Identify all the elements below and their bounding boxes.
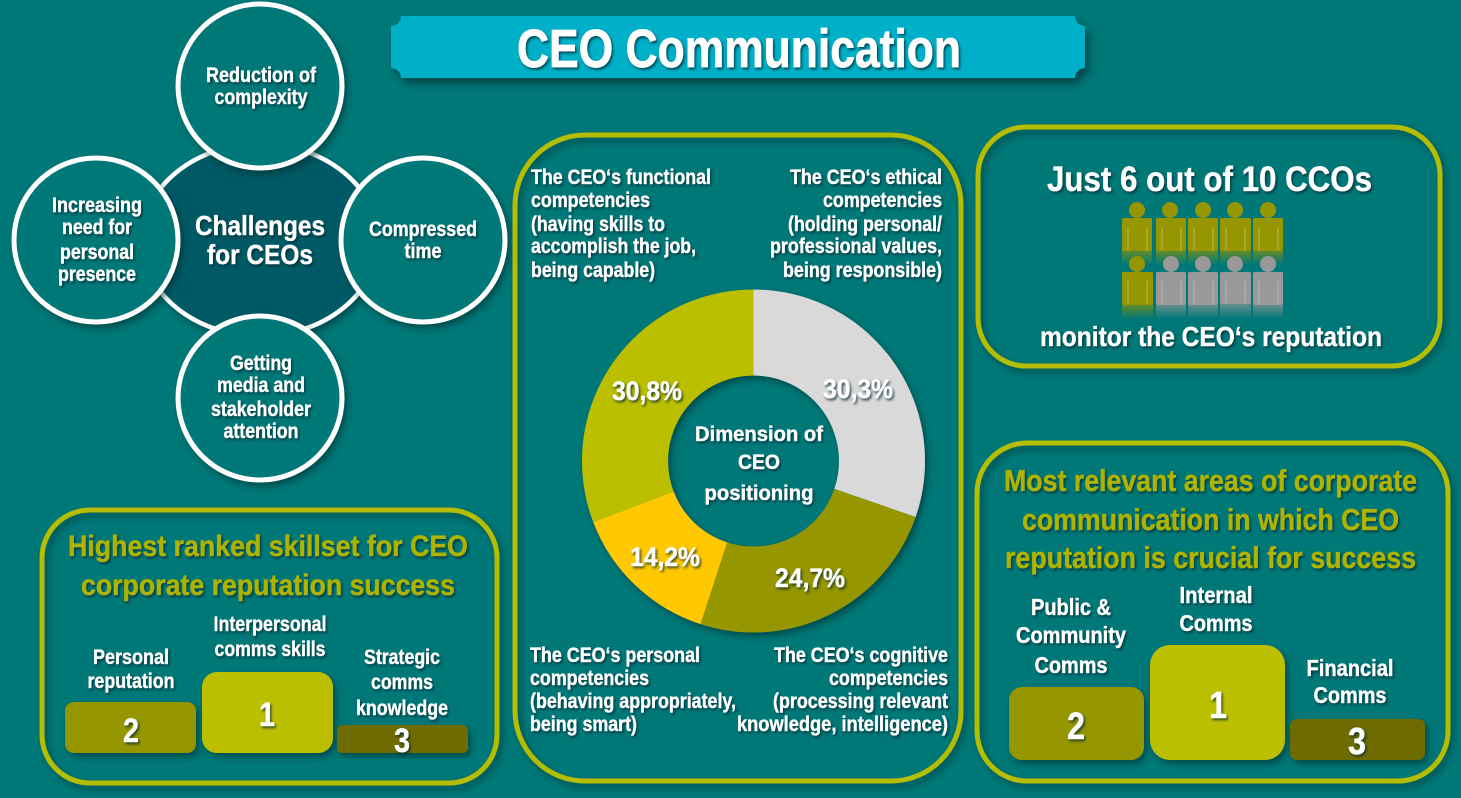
circle: increasing need for personal presence: Increasing <box>52 194 142 217</box>
text: functional competencies: competencies <box>531 189 650 212</box>
circle: compressed time <box>341 158 505 322</box>
podium: rank 2 <box>65 646 196 753</box>
donut chart <box>625 332 882 590</box>
donut values: 24,7% <box>775 563 845 593</box>
text: cognitive competencies: knowledge, intelligence) <box>737 713 948 736</box>
podium: rank 2: 2 <box>1067 706 1085 748</box>
circle: compressed time: time <box>404 240 442 263</box>
text: personal competencies: being smart) <box>530 713 637 736</box>
text: ethical competencies <box>770 166 942 282</box>
podium: rank 1: 1 <box>259 696 275 734</box>
circle: getting media and stakeholder attention: media and <box>217 374 305 397</box>
headline: Just 6 out of 10 CCOs <box>1047 160 1372 199</box>
panel: highest ranked skillset <box>42 510 497 783</box>
text: cognitive competencies: competencies <box>829 667 948 690</box>
text: functional competencies <box>531 166 711 282</box>
panel: most relevant areas <box>977 443 1448 781</box>
circle: reduction of complexity: complexity <box>214 86 308 109</box>
heading: Highest ranked skillset for CEO <box>68 530 468 563</box>
text: personal competencies: (behaving appropriately, <box>530 690 736 713</box>
podium: rank 3: Strategic <box>364 646 440 669</box>
text: personal competencies: competencies <box>530 667 649 690</box>
circle: getting media and stakeholder attention <box>178 316 342 480</box>
donut center label: CEO <box>738 451 780 474</box>
podium: rank 2: Community <box>1016 622 1126 648</box>
heading <box>1004 463 1417 575</box>
heading <box>68 530 468 602</box>
circle: getting media and stakeholder attention: attention <box>224 420 298 443</box>
circle: compressed time: Compressed <box>369 218 477 241</box>
donut center label: positioning <box>704 482 814 505</box>
podium: rank 3: knowledge <box>356 697 448 720</box>
donut values: 30,3% <box>823 374 893 404</box>
podium: rank 2 <box>1009 594 1144 760</box>
center ellipse: Challenges <box>195 210 325 241</box>
text: ethical competencies: competencies <box>823 189 942 212</box>
podium: rank 3: Comms <box>1314 682 1386 708</box>
podium: rank 2: Comms <box>1034 652 1108 678</box>
text: ethical competencies: (holding personal/ <box>788 213 942 236</box>
text: personal competencies <box>530 644 736 736</box>
donut center label: Dimension of <box>695 423 824 446</box>
podium: rank 3 <box>337 646 468 760</box>
podium: rank 3 <box>1290 655 1425 763</box>
text: ethical competencies: professional values, <box>770 235 942 258</box>
podium: rank 1 <box>202 613 333 753</box>
podium: rank 2: 2 <box>123 712 139 750</box>
center ellipse: for CEOs <box>207 239 313 270</box>
donut values: 14,2% <box>630 542 700 572</box>
diagram: challenges for CEOs <box>14 4 505 480</box>
text: cognitive competencies: The CEO‘s cognitive <box>774 644 948 667</box>
circle: increasing need for personal presence <box>14 158 178 322</box>
podium: rank 3: 3 <box>1348 721 1366 763</box>
donut values: 30,8% <box>612 376 682 406</box>
donut values <box>612 374 893 593</box>
circle: getting media and stakeholder attention: Getting <box>230 352 292 375</box>
title banner <box>391 16 1085 79</box>
circle: reduction of complexity: Reduction of <box>206 64 317 87</box>
circle: reduction of complexity <box>178 4 342 168</box>
caption: monitor the CEO‘s reputation <box>1040 321 1382 352</box>
circle: increasing need for personal presence: presence <box>58 263 136 286</box>
circle: increasing need for personal presence: personal <box>60 241 134 264</box>
text: ethical competencies: being responsible) <box>783 259 942 282</box>
text: cognitive competencies: (processing relevant <box>773 690 948 713</box>
heading: corporate reputation success <box>81 569 455 602</box>
text: ethical competencies: The CEO‘s ethical <box>790 166 942 189</box>
icon: row of people, bottom <box>1122 256 1283 319</box>
donut center label <box>695 423 824 505</box>
podium: rank 1: Internal <box>1180 582 1252 608</box>
podium: rank 1: 1 <box>1209 685 1227 727</box>
podium: rank 1: Comms <box>1180 610 1252 636</box>
circle: getting media and stakeholder attention: stakeholder <box>211 398 311 421</box>
heading: communication in which CEO <box>1022 502 1399 537</box>
title: CEO Communication <box>517 19 961 79</box>
podium: rank 2: Public & <box>1031 594 1111 620</box>
podium: rank 1 <box>1150 582 1285 760</box>
text: functional competencies: The CEO‘s functional <box>531 166 711 189</box>
icon: row of people, top <box>1122 202 1283 265</box>
circle: increasing need for personal presence: need for <box>62 216 132 239</box>
text: cognitive competencies <box>737 644 948 736</box>
text: functional competencies: (having skills to <box>531 213 665 236</box>
podium: rank 1: Interpersonal <box>214 613 326 636</box>
podium: rank 3: Financial <box>1306 655 1394 681</box>
text: functional competencies: being capable) <box>531 259 655 282</box>
podium: rank 1: comms skills <box>214 638 326 661</box>
panel: CCOs monitoring <box>978 127 1440 366</box>
podium: rank 3: comms <box>371 671 433 694</box>
podium: rank 2: reputation <box>88 670 174 693</box>
podium: rank 2: Personal <box>93 646 169 669</box>
panel: dimension of CEO positioning <box>515 135 961 781</box>
podium: rank 3: 3 <box>394 722 410 760</box>
text: personal competencies: The CEO‘s personal <box>530 644 700 667</box>
center ellipse <box>142 144 378 336</box>
text: functional competencies: accomplish the job, <box>531 235 696 258</box>
